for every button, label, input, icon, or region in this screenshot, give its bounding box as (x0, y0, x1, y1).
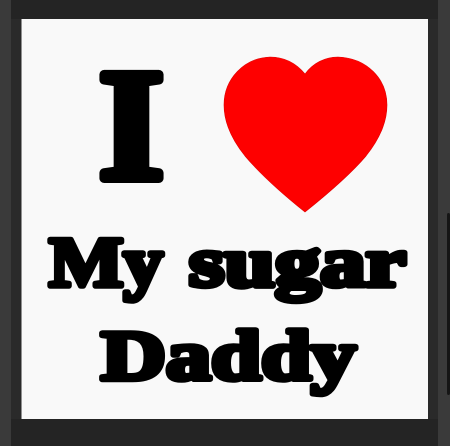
text line: My sugar: My (49, 224, 163, 302)
letter I: I (98, 38, 164, 214)
icon: red heart (224, 57, 387, 212)
text line: Daddy: Daddy (101, 318, 356, 396)
side scrollbar handle (447, 213, 450, 395)
text line: My sugar (49, 224, 406, 302)
text line: My sugar: sugar (189, 224, 406, 302)
